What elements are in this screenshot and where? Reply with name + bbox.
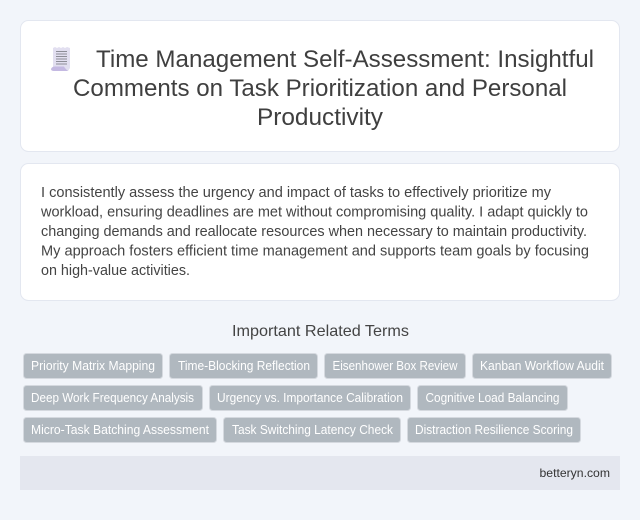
tag: Distraction Resilience Scoring [408, 418, 580, 442]
tag: Task Switching Latency Check [224, 418, 400, 442]
tag: Kanban Workflow Audit: Kanban Workflow Audit [480, 359, 604, 373]
tag: Urgency vs. Importance Calibration [210, 386, 410, 410]
body paragraph: on high-value activities. [41, 263, 190, 279]
tag: Cognitive Load Balancing: Cognitive Load Balancing [426, 391, 560, 405]
body paragraph: My approach fosters efficient time management and supports team goals by focusing [41, 244, 589, 260]
icon: paper scroll [51, 47, 70, 71]
title text [73, 46, 594, 131]
footer bar [20, 456, 620, 490]
tag: Time-Blocking Reflection [170, 354, 318, 378]
tag: Task Switching Latency Check: Task Switching Latency Check [232, 423, 394, 437]
body paragraph: I consistently assess the urgency and impact of tasks to effectively prioritize my [41, 185, 552, 201]
footer source text: betteryn.com [540, 466, 610, 480]
tag: Priority Matrix Mapping: Priority Matrix Mapping [31, 359, 155, 373]
panel: title card [20, 20, 620, 152]
tag: Priority Matrix Mapping [24, 354, 162, 378]
title text: Comments on Task Prioritization and Personal [73, 75, 567, 102]
title text: Time Management Self-Assessment: Insightful [96, 46, 594, 73]
tag: Time-Blocking Reflection: Time-Blocking Reflection [178, 359, 310, 373]
tag: Deep Work Frequency Analysis [24, 386, 202, 410]
tag: Micro-Task Batching Assessment: Micro-Task Batching Assessment [31, 423, 209, 437]
body paragraph [40, 185, 589, 279]
panel: assessment comment [20, 164, 620, 300]
heading: related terms: Important Related Terms [232, 323, 409, 340]
title text: Productivity [257, 104, 383, 131]
tag: Eisenhower Box Review: Eisenhower Box Review [332, 359, 458, 373]
body paragraph: workload, ensuring deadlines are met without compromising quality. I adapt quickly to [40, 204, 588, 220]
tag: Urgency vs. Importance Calibration: Urgency vs. Importance Calibration [217, 391, 403, 405]
tag: Eisenhower Box Review [324, 354, 466, 378]
tag: Distraction Resilience Scoring: Distraction Resilience Scoring [415, 423, 573, 437]
tag: Kanban Workflow Audit [472, 354, 612, 378]
body paragraph: changing demands and reallocate resources when necessary to maintain productivity. [41, 224, 587, 240]
tag group: related terms [24, 354, 612, 442]
tag: Micro-Task Batching Assessment [24, 418, 216, 442]
tag: Deep Work Frequency Analysis: Deep Work Frequency Analysis [31, 391, 194, 405]
tag: Cognitive Load Balancing [418, 386, 568, 410]
